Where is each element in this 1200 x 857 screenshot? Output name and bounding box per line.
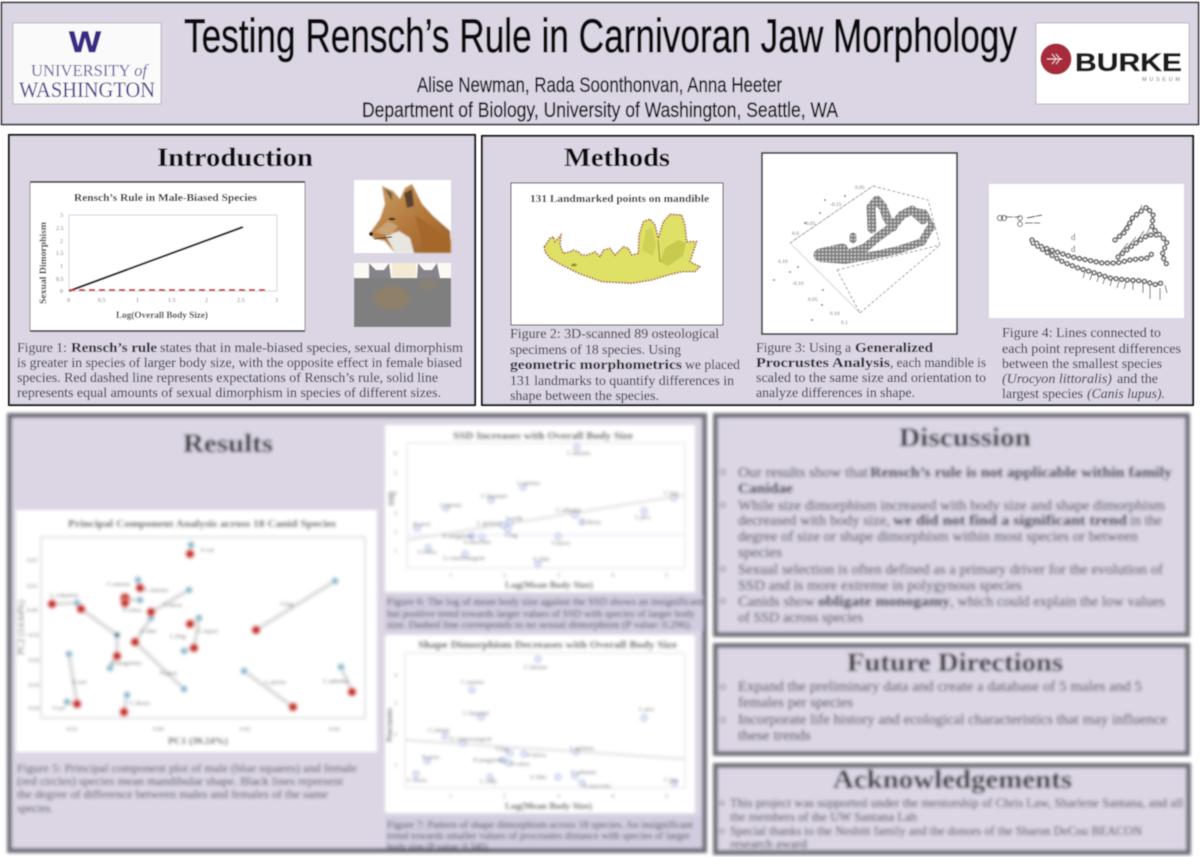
caption: figure 5 xyxy=(17,761,357,815)
bullet list: future directions: these trends xyxy=(738,728,811,744)
chart: shape dimorphism vs body size: V.fulva xyxy=(527,752,546,759)
caption: figure 3 xyxy=(756,341,986,401)
caption: figure 4: (Urocyon littoralis) xyxy=(1002,372,1112,387)
chart: SSD vs body size: V.macrotis xyxy=(463,539,491,546)
photo: red fox xyxy=(354,180,451,253)
caption: figure 4: Figure 4: Lines connected to xyxy=(1002,326,1161,341)
logo: Burke Museum xyxy=(1036,23,1189,104)
chart: principal component analysis: N.proc xyxy=(160,670,178,677)
bullet list: discussion points: of SSD across species xyxy=(738,610,863,626)
caption: figure 2: geometric morphometrics xyxy=(510,358,683,373)
caption: figure 6 xyxy=(385,595,703,631)
chart: principal component analysis: PC2 (14.64%) xyxy=(16,600,27,655)
chart: SSD vs body size: 3 xyxy=(557,573,560,579)
chart: principal component analysis: L.pictus xyxy=(265,679,287,686)
chart: principal component analysis: V.vul xyxy=(200,547,214,554)
chart: SSD vs body size: C.simen xyxy=(440,502,462,509)
chart: shape dimorphism vs body size: 4 xyxy=(394,673,397,679)
bullet list: discussion points: Canidae xyxy=(738,481,794,497)
chart: principal component analysis: C.aureus xyxy=(107,581,130,588)
chart: principal component analysis: N.megalotis xyxy=(110,660,142,667)
chart: Rensch's rule line chart: 2 xyxy=(60,239,63,245)
caption: figure 1: species. Red dashed line represents expectations of Rensch’s rule, solid line xyxy=(17,371,438,386)
chart: SSD vs body size: C.aureus xyxy=(517,480,540,487)
chart: shape dimorphism vs body size: L.griseus xyxy=(570,745,594,752)
bullet list: discussion points: While size dimorphism increased with body size and shape dimorphism xyxy=(738,498,1166,514)
chart: Rensch's rule line chart: 0.5 xyxy=(56,277,64,283)
sharp upper poster area xyxy=(2,2,1198,405)
heading: future directions: Future Directions xyxy=(847,648,1063,677)
caption: figure 3: Generalized xyxy=(855,341,933,356)
heading: methods: Methods xyxy=(564,143,670,172)
caption: figure 5: the degree of difference between males and females of the same xyxy=(17,787,328,801)
heading: discussion: Discussion xyxy=(899,423,1032,452)
chart: Rensch's rule line chart: 0 xyxy=(67,298,70,304)
chart: SSD vs body size: L.pict xyxy=(635,514,651,521)
chart: shape dimorphism vs body size: 1 xyxy=(394,763,397,769)
panel: acknowledgements xyxy=(716,765,1188,852)
figure 2: landmarked mandible: 131 Landmarked points on mandible xyxy=(530,194,709,205)
caption: figure 3: Procrustes Analysis xyxy=(756,356,891,371)
caption: figure 7: Figure 7: Pattern of shape dimorphism across 18 species. An insignificant xyxy=(387,820,693,831)
bullet list: discussion points: Our results show that xyxy=(738,465,868,481)
chart: SSD vs body size: 5 xyxy=(394,471,397,477)
chart: principal component analysis: L.ling xyxy=(170,633,186,640)
bullet list: discussion points: degree of size or shape dimorphism within most species or between xyxy=(738,529,1139,545)
caption: figure 1: is greater in species of larger body size, with the opposite effect in female biased xyxy=(17,356,462,371)
logo: Burke Museum: BURKE xyxy=(1075,49,1182,77)
chart: principal component analysis: C.lupus xyxy=(198,628,219,635)
chart: SSD vs body size: 1 xyxy=(449,573,452,579)
bullet list: discussion points: species xyxy=(738,545,782,561)
chart: SSD vs body size: L.griseus xyxy=(477,520,501,527)
bullet list: acknowledgements: the members of the UW Santana Lab xyxy=(730,810,917,824)
chart: SSD vs body size: 4 xyxy=(611,573,614,579)
chart: principal component analysis: -0.01 xyxy=(27,633,40,639)
chart: SSD vs body size: Log(Mean Body Size) xyxy=(505,580,593,590)
caption: figure 4 xyxy=(1002,326,1181,402)
chart: principal component analysis: 0.02 xyxy=(27,558,38,564)
bullet list: acknowledgements: This project was supported under the mentorship of Chris Law, Sharlene Santana, and all xyxy=(730,796,1184,810)
chart: shape dimorphism vs body size: 1 xyxy=(449,794,452,800)
chart: SSD vs body size xyxy=(385,425,695,592)
photo: second fox, obscured xyxy=(354,263,451,327)
chart: SSD vs body size: 2 xyxy=(503,573,506,579)
figure 3: generalized procrustes analysis plot: 0.05 xyxy=(855,185,865,191)
chart: Rensch's rule line chart xyxy=(30,182,305,331)
bullet list: future directions: Incorporate life history and ecological characteristics that may influence xyxy=(738,712,1167,728)
caption: figure 1: represents equal amounts of sexual dimorphism in species of different sizes. xyxy=(17,386,441,401)
caption: figure 3: , each mandible is xyxy=(890,356,986,371)
chart: SSD vs body size: 4 xyxy=(394,491,397,497)
caption: figure 2: Figure 2: 3D-scanned 89 osteological xyxy=(510,327,719,342)
chart: shape dimorphism vs body size: C.thous xyxy=(407,777,428,784)
bullet list: acknowledgements: research award xyxy=(730,837,808,851)
bullet list: discussion points: SSD and is more extreme in polygynous species xyxy=(738,578,1022,594)
chart: shape dimorphism vs body size: 4 xyxy=(611,794,614,800)
authors: Alise Newman, Rada Soonthonvan, Anna Heeter xyxy=(417,74,782,97)
bullet list: discussion points: , which could explain the low values xyxy=(950,594,1165,610)
chart: SSD vs body size: C.lup xyxy=(664,490,678,497)
chart: Rensch's rule line chart: 2.5 xyxy=(237,298,244,304)
chart: principal component analysis: 0.00 xyxy=(153,727,164,733)
bullet list: discussion points: decreased with body size, xyxy=(738,513,890,529)
bullet list: acknowledgements: Special thanks to the Nesbitt family and the donors of the Sharon DeCou BEACON xyxy=(730,824,1142,838)
logo: University of Washington: UNIVERSITY of xyxy=(31,61,149,80)
chart: shape dimorphism vs body size: Procrustes xyxy=(385,708,394,742)
chart: shape dimorphism vs body size: C.latrans xyxy=(524,664,548,671)
chart: principal component analysis: 0.04 xyxy=(329,727,340,733)
chart: shape dimorphism vs body size: 2 xyxy=(503,794,506,800)
figure 4: landmark difference vectors: d xyxy=(1071,244,1076,254)
figure 4: landmark difference vectors: d xyxy=(1071,232,1076,242)
chart: SSD vs body size: C.lupaster xyxy=(481,493,508,500)
chart: shape dimorphism vs body size: Log(Mean Body Size) xyxy=(505,801,592,811)
chart: Rensch's rule line chart: 0 xyxy=(60,289,63,295)
caption: figure 7: body size (P value: 0.340). xyxy=(387,842,490,853)
heading: acknowledgements: Acknowledgements xyxy=(833,765,1072,794)
figure 3: generalized procrustes analysis plot: -0.10 xyxy=(792,281,804,287)
chart: Rensch's rule line chart: 2 xyxy=(205,298,208,304)
chart: Rensch's rule line chart: 2.5 xyxy=(56,226,64,232)
chart: Rensch's rule line chart: 1.5 xyxy=(56,251,64,257)
heading: introduction: Introduction xyxy=(157,143,314,172)
chart: SSD vs body size: U.litto xyxy=(533,556,550,563)
chart: SSD vs body size: N.megalotis xyxy=(442,533,474,540)
chart: shape dimorphism vs body size: C.lup xyxy=(664,777,678,784)
chart: principal component analysis: PC1 (39.24%) xyxy=(168,736,228,747)
bullet list: discussion points: Canids show xyxy=(738,594,816,610)
chart: shape dimorphism vs body size: C.aureus xyxy=(461,679,484,686)
chart: Rensch's rule line chart: Sexual Dimorphism xyxy=(38,221,48,304)
chart: Rensch's rule line chart: Log(Overall Body Size) xyxy=(116,310,208,320)
chart: shape dimorphism vs body size: N.megalotis xyxy=(473,757,505,764)
blurred lower poster area xyxy=(10,416,1188,853)
chart: principal component analysis: S.ven xyxy=(72,679,87,686)
chart: shape dimorphism vs body size: C.simen xyxy=(428,727,450,734)
chart: SSD vs body size: 1 xyxy=(394,549,397,555)
chart: shape dimorphism vs body size: 3 xyxy=(394,701,397,707)
chart: principal component analysis xyxy=(16,510,377,752)
caption: figure 4: between the smallest species xyxy=(1002,357,1162,372)
figure 3: generalized procrustes analysis plot xyxy=(762,153,957,334)
chart: SSD vs body size: L.culp xyxy=(506,515,523,522)
chart: shape dimorphism vs body size: L.pict xyxy=(639,706,655,713)
figure 3: generalized procrustes analysis plot: 0.1 xyxy=(841,320,848,326)
chart: principal component analysis: -0.04 xyxy=(27,706,40,712)
figure 3: generalized procrustes analysis plot: -0.05 xyxy=(804,221,816,227)
caption: figure 1: Figure 1: xyxy=(17,341,67,356)
chart: SSD vs body size: C.adustus xyxy=(556,507,582,514)
chart: principal component analysis: C.thous xyxy=(130,700,151,707)
panel: methods xyxy=(482,136,1193,405)
caption: figure 2 xyxy=(510,327,740,404)
chart: shape dimorphism vs body size: V.lag xyxy=(495,746,509,753)
caption: figure 2: specimens of 18 species. Using xyxy=(510,343,681,358)
logo: University of Washington xyxy=(13,23,161,104)
figure 3: generalized procrustes analysis plot: 0.0 xyxy=(792,231,799,237)
bullet list: acknowledgements xyxy=(720,796,1184,851)
chart: principal component analysis: 0.02 xyxy=(240,727,250,733)
chart: shape dimorphism vs body size: C.adustus xyxy=(571,769,597,776)
caption: figure 3: Figure 3: Using a xyxy=(756,341,852,356)
chart: principal component analysis: L.culpaeus xyxy=(50,592,79,599)
chart: principal component analysis: 0.00 xyxy=(27,608,38,614)
chart: principal component analysis: U.litto xyxy=(140,628,157,635)
caption: figure 2: 131 landmarks to quantify differences in xyxy=(510,374,734,389)
chart: SSD vs body size: 6 xyxy=(394,451,397,457)
caption: figure 7 xyxy=(385,816,701,853)
bullet list: discussion points: we did not find a significant trend xyxy=(893,513,1127,529)
chart: shape dimorphism vs body size: C.lupaster xyxy=(463,710,490,717)
chart: SSD vs body size: U.cinereoargent xyxy=(443,555,485,562)
bullet list: future directions: Expand the preliminary data and create a database of 5 males and 5 xyxy=(738,679,1142,695)
chart: shape dimorphism vs body size: U.litto xyxy=(530,774,547,781)
caption: figure 7: trend towards smaller values of procrustes distance with species of larger xyxy=(387,831,691,842)
figure 3: generalized procrustes analysis plot: 0.05 xyxy=(808,297,818,303)
chart: SSD vs body size: C.latrans xyxy=(567,450,591,457)
chart: SSD vs body size: V.lag xyxy=(504,532,518,539)
caption: figure 4: and the xyxy=(1117,372,1158,387)
chart: Rensch's rule line chart: 1.5 xyxy=(168,298,176,304)
chart: shape dimorphism vs body size: 2 xyxy=(394,732,397,738)
chart: shape dimorphism vs body size: N.proc xyxy=(422,754,440,761)
chart: principal component analysis: V.zer xyxy=(52,705,66,712)
bullet list: discussion points: in the xyxy=(1130,513,1162,529)
figure 2: landmarked mandible xyxy=(511,183,723,325)
chart: principal component analysis: V.lag xyxy=(280,601,294,608)
caption: figure 6: but positive trend towards larger values of SSD with species of larger body xyxy=(387,609,695,620)
panel: discussion xyxy=(716,416,1188,634)
chart: SSD vs body size: SSD Increases with Overall Body Size xyxy=(453,431,633,442)
caption: figure 3: scaled to the same size and orientation to xyxy=(756,371,986,386)
caption: figure 1: Rensch’s rule xyxy=(71,341,157,356)
caption: figure 4: each point represent differences xyxy=(1002,342,1181,357)
panel: future directions xyxy=(716,646,1188,754)
logo: University of Washington: WASHINGTON xyxy=(19,77,155,102)
chart: SSD vs body size: N.proc xyxy=(413,521,431,528)
chart: principal component analysis: C.latrans xyxy=(145,587,169,594)
caption: figure 5: Figure 5: Principal component plot of male (blue squares) and female xyxy=(17,761,357,775)
bullet list: discussion points xyxy=(720,465,1173,626)
bullet list: future directions xyxy=(720,679,1167,744)
chart: principal component analysis: -0.02 xyxy=(27,658,40,664)
figure 3: generalized procrustes analysis plot: -0.15 xyxy=(830,202,842,208)
caption: figure 3: analyze differences in shape. xyxy=(756,386,915,401)
chart: principal component analysis: V.fulva xyxy=(163,602,182,609)
chart: SSD vs body size: 2 xyxy=(394,530,397,536)
caption: figure 6: Figure 6: The log of mean body size against the SSD shows an insignificant xyxy=(387,597,703,608)
chart: SSD vs body size: 3 xyxy=(394,511,397,517)
chart: shape dimorphism vs body size xyxy=(385,635,695,813)
chart: principal component analysis: Principal Component Analysis across 18 Canid Species xyxy=(68,519,336,530)
chart: shape dimorphism vs body size: U.cinereoargent xyxy=(450,736,492,743)
logo: University of Washington: W xyxy=(69,26,102,59)
panel: results xyxy=(10,416,704,853)
caption: figure 4: (Canis lupus). xyxy=(1087,387,1165,402)
chart: shape dimorphism vs body size: V.macrotis xyxy=(583,783,611,790)
chart: Rensch's rule line chart: Rensch’s Rule in Male-Biased Species xyxy=(74,193,257,204)
bullet list: discussion points: Sexual selection is often defined as a primary driver for the evolution of xyxy=(738,562,1163,578)
chart: SSD vs body size: SSD xyxy=(387,491,396,506)
chart: Rensch's rule line chart: 0.5 xyxy=(98,298,106,304)
bullet list: future directions: females per species xyxy=(738,695,853,711)
chart: SSD vs body size: 5 xyxy=(665,573,668,579)
chart: principal component analysis: -0.02 xyxy=(65,727,78,733)
caption: figure 1 xyxy=(17,341,463,401)
chart: principal component analysis: V.velox xyxy=(122,607,143,614)
header banner xyxy=(2,2,1198,124)
chart: Rensch's rule line chart: 3 xyxy=(60,213,63,219)
chart: principal component analysis: 0.01 xyxy=(27,584,38,590)
chart: shape dimorphism vs body size: 5 xyxy=(665,794,668,800)
caption: figure 2: shape between the species. xyxy=(510,389,659,404)
chart: SSD vs body size: V.fulva xyxy=(551,540,570,547)
caption: figure 2: we placed xyxy=(685,358,740,373)
affiliation: Department of Biology, University of Washington, Seattle, WA xyxy=(362,99,838,122)
chart: Rensch's rule line chart: 3 xyxy=(275,298,278,304)
bullet list: discussion points: Rensch’s rule is not applicable within family xyxy=(870,465,1173,481)
chart: Rensch's rule line chart: 1 xyxy=(60,264,63,270)
bullet list: discussion points: obligate monogamy xyxy=(818,594,951,610)
chart: shape dimorphism vs body size: 3 xyxy=(557,794,560,800)
chart: shape dimorphism vs body size: L.culp xyxy=(480,778,497,785)
chart: principal component analysis: -0.03 xyxy=(27,683,40,689)
logo: Burke Museum: MUSEUM xyxy=(1142,77,1180,83)
chart: SSD vs body size: C.thous xyxy=(581,519,602,526)
chart: SSD vs body size: V.velox xyxy=(417,549,438,556)
caption: figure 5: species. xyxy=(17,801,53,815)
chart: principal component analysis: C.adustus xyxy=(323,678,349,685)
caption: figure 5: (red circles) species mean mandibular shape. Black lines represent xyxy=(17,774,344,788)
figure 3: generalized procrustes analysis plot: 0.10 xyxy=(778,259,788,265)
figure 4: landmark difference vectors xyxy=(989,184,1184,318)
chart: shape dimorphism vs body size: Shape Dimorphism Decreases with Overall Body Size xyxy=(418,640,677,651)
chart: Rensch's rule line chart: 1 xyxy=(136,298,139,304)
caption: figure 1: states that in male-biased species, sexual dimorphism xyxy=(160,341,463,356)
figure 3: generalized procrustes analysis plot: 0.10 xyxy=(830,311,840,317)
caption: figure 4: largest species xyxy=(1002,387,1083,402)
panel: introduction xyxy=(9,135,475,405)
heading: results: Results xyxy=(183,429,273,458)
chart: shape dimorphism vs body size: V.velox xyxy=(510,761,531,768)
caption: figure 6: size. Dashed line corresponds to no sexual dimorphism (P value: 0.296). xyxy=(387,620,692,631)
